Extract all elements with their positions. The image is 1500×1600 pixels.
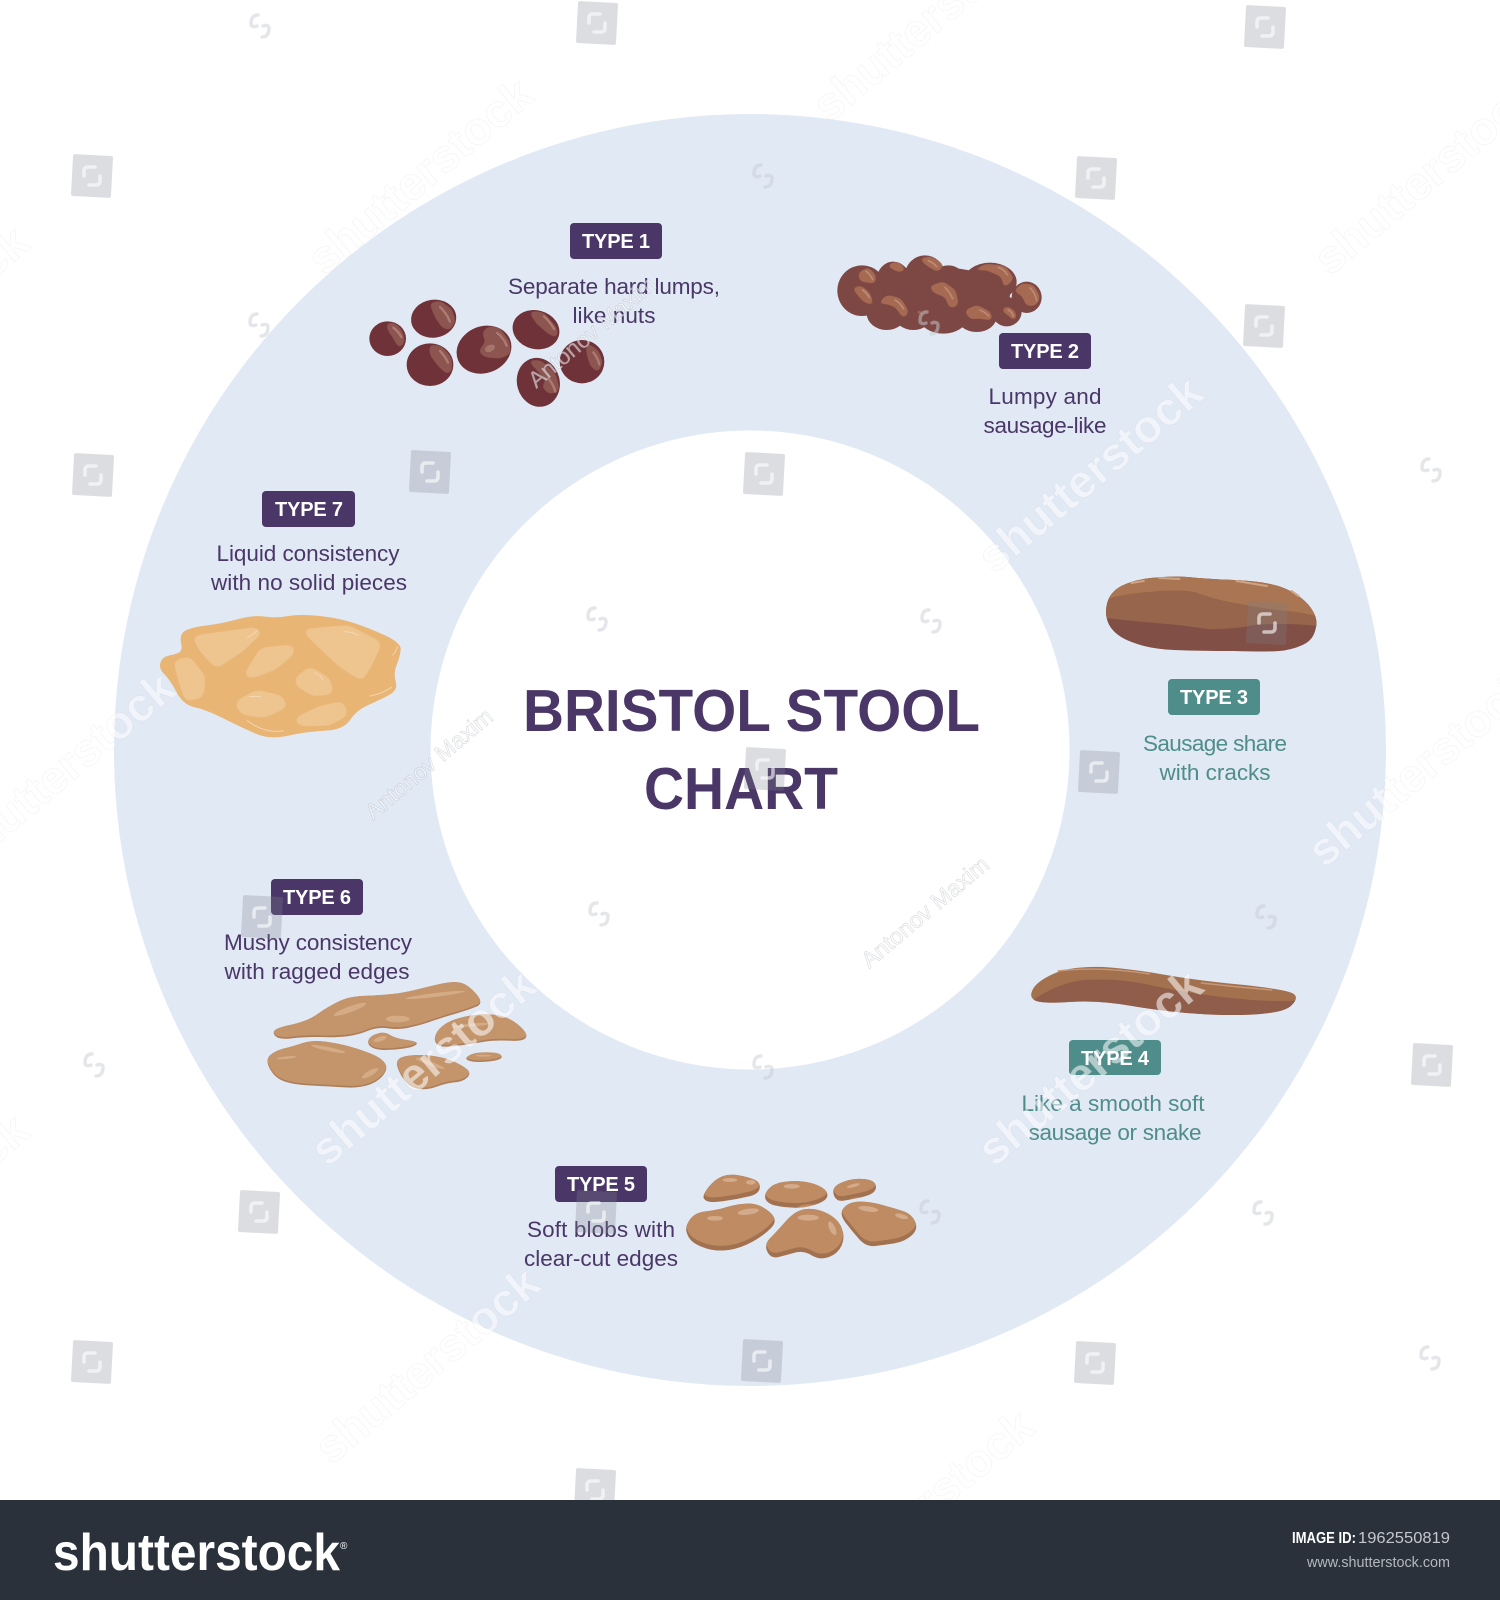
watermark: diagonal text: shutterstock: [967, 958, 1212, 1175]
panel: type 3: [1106, 576, 1316, 780]
badge: type 3: [1168, 679, 1260, 715]
badge: type 4: TYPE 4: [1081, 1048, 1150, 1070]
image id: 1962550819: [1358, 1530, 1450, 1547]
title: [523, 678, 980, 822]
description: type 1: like nuts: [572, 303, 656, 328]
panel: type 5: [524, 1166, 916, 1271]
website: www.shutterstock.com: [1306, 1554, 1450, 1571]
illustration: lumpy sausage: [837, 255, 1042, 334]
description: type 6: Mushy consistency: [224, 930, 413, 955]
badge: type 6: TYPE 6: [283, 887, 351, 909]
title: CHART: [644, 756, 838, 822]
panel: type 2: [837, 255, 1106, 438]
panel: type 7: [160, 491, 407, 737]
description: type 6: with ragged edges: [224, 959, 410, 984]
footer band: [0, 1500, 1500, 1600]
description: type 4: [1022, 1091, 1205, 1145]
watermark: diagonal text: Antonov Maxim: [523, 271, 661, 393]
badge: type 7: [262, 491, 355, 527]
badge: type 4: [1069, 1040, 1161, 1075]
illustration: smooth sausage: [1031, 966, 1296, 1015]
watermark: diagonal text: shutterstock: [967, 365, 1212, 582]
panel: type 1: [369, 223, 720, 412]
badge: type 1: [570, 223, 662, 259]
description: type 5: Soft blobs with: [527, 1217, 675, 1242]
description: type 7: Liquid consistency: [216, 541, 400, 566]
watermark: diagonal text: Antonov Maxim: [360, 703, 498, 825]
badge: type 2: [999, 333, 1091, 369]
image id: [1292, 1530, 1450, 1547]
footer logo: ®: [340, 1541, 348, 1552]
description: type 6: [224, 930, 413, 984]
badge: type 7: TYPE 7: [275, 499, 343, 521]
illustration: separate hard lumps: [369, 297, 604, 412]
description: type 3: with cracks: [1158, 760, 1270, 785]
illustration: liquid puddle: [160, 615, 401, 737]
description: type 2: sausage-like: [984, 413, 1106, 438]
description: type 1: [508, 274, 720, 328]
description: type 3: [1143, 731, 1287, 785]
watermark: diagonal text: shutterstock: [304, 1256, 549, 1473]
badge: type 2: TYPE 2: [1011, 341, 1079, 363]
illustration: ragged pieces: [267, 980, 526, 1089]
description: type 7: [210, 541, 407, 595]
badge: type 5: TYPE 5: [567, 1174, 635, 1196]
description: type 7: with no solid pieces: [210, 570, 407, 595]
panel: type 4: [1022, 967, 1303, 1145]
watermark: diagonal text: shutterstock: [297, 67, 542, 284]
illustration: sausage with cracks: [1106, 576, 1316, 652]
description: type 1: Separate hard lumps,: [508, 274, 720, 299]
image id: IMAGE ID:: [1292, 1530, 1356, 1547]
description: type 3: Sausage share: [1143, 731, 1287, 756]
panel: type 6: [224, 879, 526, 1089]
badge: type 3: TYPE 3: [1180, 687, 1248, 709]
watermark: diagonal text: Antonov Maxim: [856, 851, 994, 973]
footer logo: shutterstock: [53, 1524, 340, 1582]
description: type 4: Like a smooth soft: [1022, 1091, 1205, 1116]
watermark: diagonal text: shutterstock: [300, 958, 545, 1175]
ring background: [114, 114, 1386, 1386]
badge: type 1: TYPE 1: [582, 231, 650, 253]
description: type 2: [984, 384, 1106, 438]
illustration: soft blobs: [686, 1170, 916, 1258]
description: type 4: sausage or snake: [1028, 1120, 1202, 1145]
badge: type 6: [271, 879, 363, 915]
description: type 5: [524, 1217, 678, 1271]
description: type 2: Lumpy and: [988, 384, 1102, 409]
description: type 5: clear-cut edges: [524, 1246, 678, 1271]
title: BRISTOL STOOL: [523, 678, 980, 744]
badge: type 5: [555, 1166, 647, 1202]
